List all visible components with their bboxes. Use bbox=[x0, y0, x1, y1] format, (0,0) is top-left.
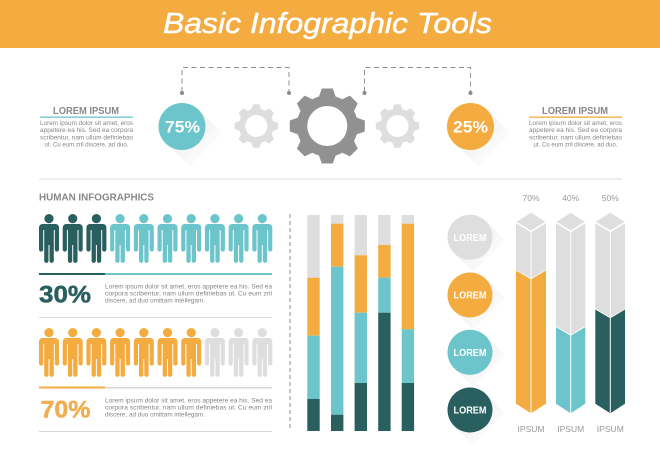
3D bar 50% dark teal bbox=[595, 193, 625, 434]
3D bar chart bbox=[516, 193, 625, 434]
bar 2 bbox=[331, 215, 343, 431]
text block right: scribentur, nam ullum definiebas bbox=[529, 134, 623, 141]
bar 4 bbox=[378, 215, 391, 431]
text block right bbox=[529, 106, 623, 148]
bar 5 bbox=[402, 215, 414, 431]
3D bar 50% dark teal: 50% bbox=[602, 193, 619, 203]
text block left: ut. Cu eum zril discere, ad duo. bbox=[44, 142, 129, 148]
text block: discere, ad duo omittam intellegam. bbox=[105, 298, 205, 305]
title: Basic Infographic Tools bbox=[163, 8, 492, 40]
text block left: scribentur, nam ullum definiebas bbox=[40, 134, 134, 141]
text block: Lorem ipsum dolor sit amet, eros appetere ea his. Sed ea bbox=[105, 397, 272, 404]
text block left bbox=[40, 106, 134, 148]
icon row: people orange and gray bbox=[39, 328, 272, 377]
3D bar 70% orange: IPSUM bbox=[518, 424, 544, 434]
progress bar 70% bbox=[39, 386, 272, 388]
icon: large gear bbox=[290, 88, 365, 164]
legend circles bbox=[448, 215, 505, 445]
legend: gray: LOREM bbox=[454, 233, 486, 244]
text block bbox=[105, 283, 273, 305]
header banner bbox=[0, 0, 660, 48]
stat: 75%: 75% bbox=[165, 119, 200, 137]
text block: discere, ad duo omittam intellegam. bbox=[105, 412, 205, 419]
text block right: ut. Cu eum zril discere, ad duo. bbox=[534, 142, 618, 148]
icon: small gear right bbox=[376, 105, 419, 147]
bar 3 bbox=[355, 215, 367, 431]
legend: dark teal: LOREM bbox=[454, 406, 486, 417]
text block right: LOREM IPSUM bbox=[542, 106, 608, 117]
text block left: appetere ea his. Sed ea corpora bbox=[40, 127, 133, 134]
dashed connector left bbox=[180, 68, 291, 95]
text block right: appetere ea his. Sed ea corpora bbox=[529, 127, 622, 134]
3D bar 40% teal: IPSUM bbox=[557, 424, 584, 434]
bar 1 bbox=[307, 215, 320, 431]
stat: 25%: 25% bbox=[453, 119, 488, 137]
3D bar 40% teal: 40% bbox=[562, 193, 580, 203]
legend: orange bbox=[448, 272, 505, 330]
heading: human infographics: HUMAN INFOGRAPHICS bbox=[39, 192, 154, 204]
text block: corpora scribentur, nam ullum definiebas ut. Cu eum zril bbox=[105, 404, 273, 412]
text block: Lorem ipsum dolor sit amet, eros appetere ea his. Sed ea bbox=[105, 283, 272, 290]
stat: 30%: 30% bbox=[39, 282, 91, 309]
panel: 30% people row bbox=[39, 214, 273, 309]
panel: 70% people row bbox=[39, 328, 273, 423]
3D bar 70% orange: 70% bbox=[522, 193, 540, 203]
3D bar 40% teal bbox=[556, 193, 585, 434]
legend: teal bbox=[448, 330, 505, 387]
stacked bar chart bbox=[307, 215, 414, 431]
legend: dark teal bbox=[448, 388, 505, 445]
stat: 25% bbox=[447, 103, 510, 166]
text block: corpora scribentur, nam ullum definiebas ut. Cu eum zril bbox=[105, 290, 273, 298]
icon: small gear left bbox=[235, 105, 278, 147]
text block right: Lorem ipsum dolor sit amet, eros bbox=[529, 120, 623, 127]
legend: teal: LOREM bbox=[454, 348, 486, 359]
3D bar 70% orange bbox=[516, 193, 546, 434]
dashed connector right bbox=[362, 68, 472, 95]
legend: orange: LOREM bbox=[454, 291, 486, 302]
text block bbox=[105, 397, 273, 419]
progress bar 30% bbox=[39, 273, 272, 275]
text block left: Lorem ipsum dolor sit amet, eros bbox=[40, 120, 134, 127]
3D bar 50% dark teal: IPSUM bbox=[597, 424, 624, 434]
legend: gray bbox=[448, 215, 505, 272]
stat: 70%: 70% bbox=[40, 396, 91, 423]
icon row: people dark and teal bbox=[39, 214, 272, 263]
panel: gears and percentages bbox=[40, 68, 623, 166]
stat: 75% bbox=[158, 103, 222, 166]
text block left: LOREM IPSUM bbox=[53, 106, 119, 117]
